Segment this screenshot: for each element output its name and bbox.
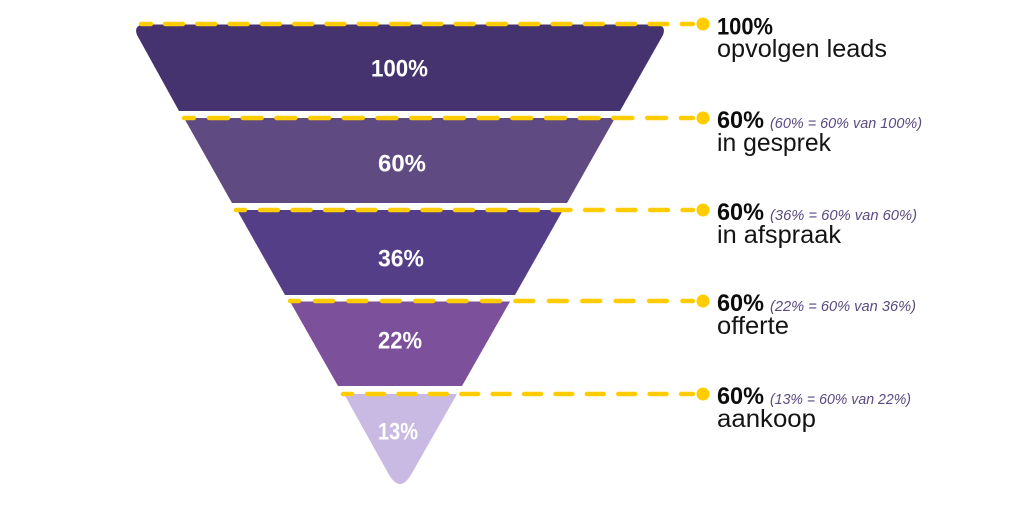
label: 60% offerte: offerte (717, 312, 789, 340)
label: 60% aankoop (717, 383, 911, 433)
funnel band: 60% (184, 118, 615, 203)
label: 60% in gesprek: 60% (717, 107, 764, 134)
funnel band: 36% (237, 210, 563, 295)
label: 60% in gesprek: in gesprek (717, 129, 831, 157)
label: 100% opvolgen leads: 100% (717, 14, 773, 40)
leader line: 60% in afspraak (236, 204, 710, 216)
label: 60% in afspraak: in afspraak (717, 221, 842, 249)
funnel band: 36%: 36% (378, 246, 424, 272)
funnel band: 22%: 22% (378, 328, 422, 354)
leader line: 100% (141, 18, 710, 30)
label: 60% aankoop: (13% = 60% van 22%) (770, 392, 911, 408)
funnel band: 100%: 100% (371, 56, 428, 82)
leader line: 60% in gesprek (184, 112, 710, 124)
funnel band: 60%: 60% (378, 150, 426, 178)
label: 60% in afspraak: 60% (717, 199, 764, 226)
label: 60% aankoop: 60% (717, 383, 764, 410)
funnel band: 13% (344, 394, 457, 484)
label: 60% offerte: (22% = 60% van 36%) (770, 299, 916, 315)
funnel band: 100% (136, 24, 664, 111)
label: 100% opvolgen leads: opvolgen leads (717, 35, 887, 63)
funnel band: 22% (290, 302, 510, 386)
label: 60% in afspraak: (36% = 60% van 60%) (770, 208, 917, 224)
label: 60% in gesprek (717, 107, 922, 157)
label: 100% opvolgen leads (717, 14, 887, 63)
leader line: 60% offerte (290, 294, 710, 308)
leader line: 60% aankoop (343, 388, 710, 400)
label: 60% offerte (717, 290, 916, 340)
label: 60% in gesprek: (60% = 60% van 100%) (770, 116, 922, 132)
funnel band: 13%: 13% (378, 418, 418, 446)
label: 60% aankoop: aankoop (717, 405, 816, 433)
label: 60% in afspraak (717, 199, 917, 249)
label: 60% offerte: 60% (717, 290, 764, 317)
